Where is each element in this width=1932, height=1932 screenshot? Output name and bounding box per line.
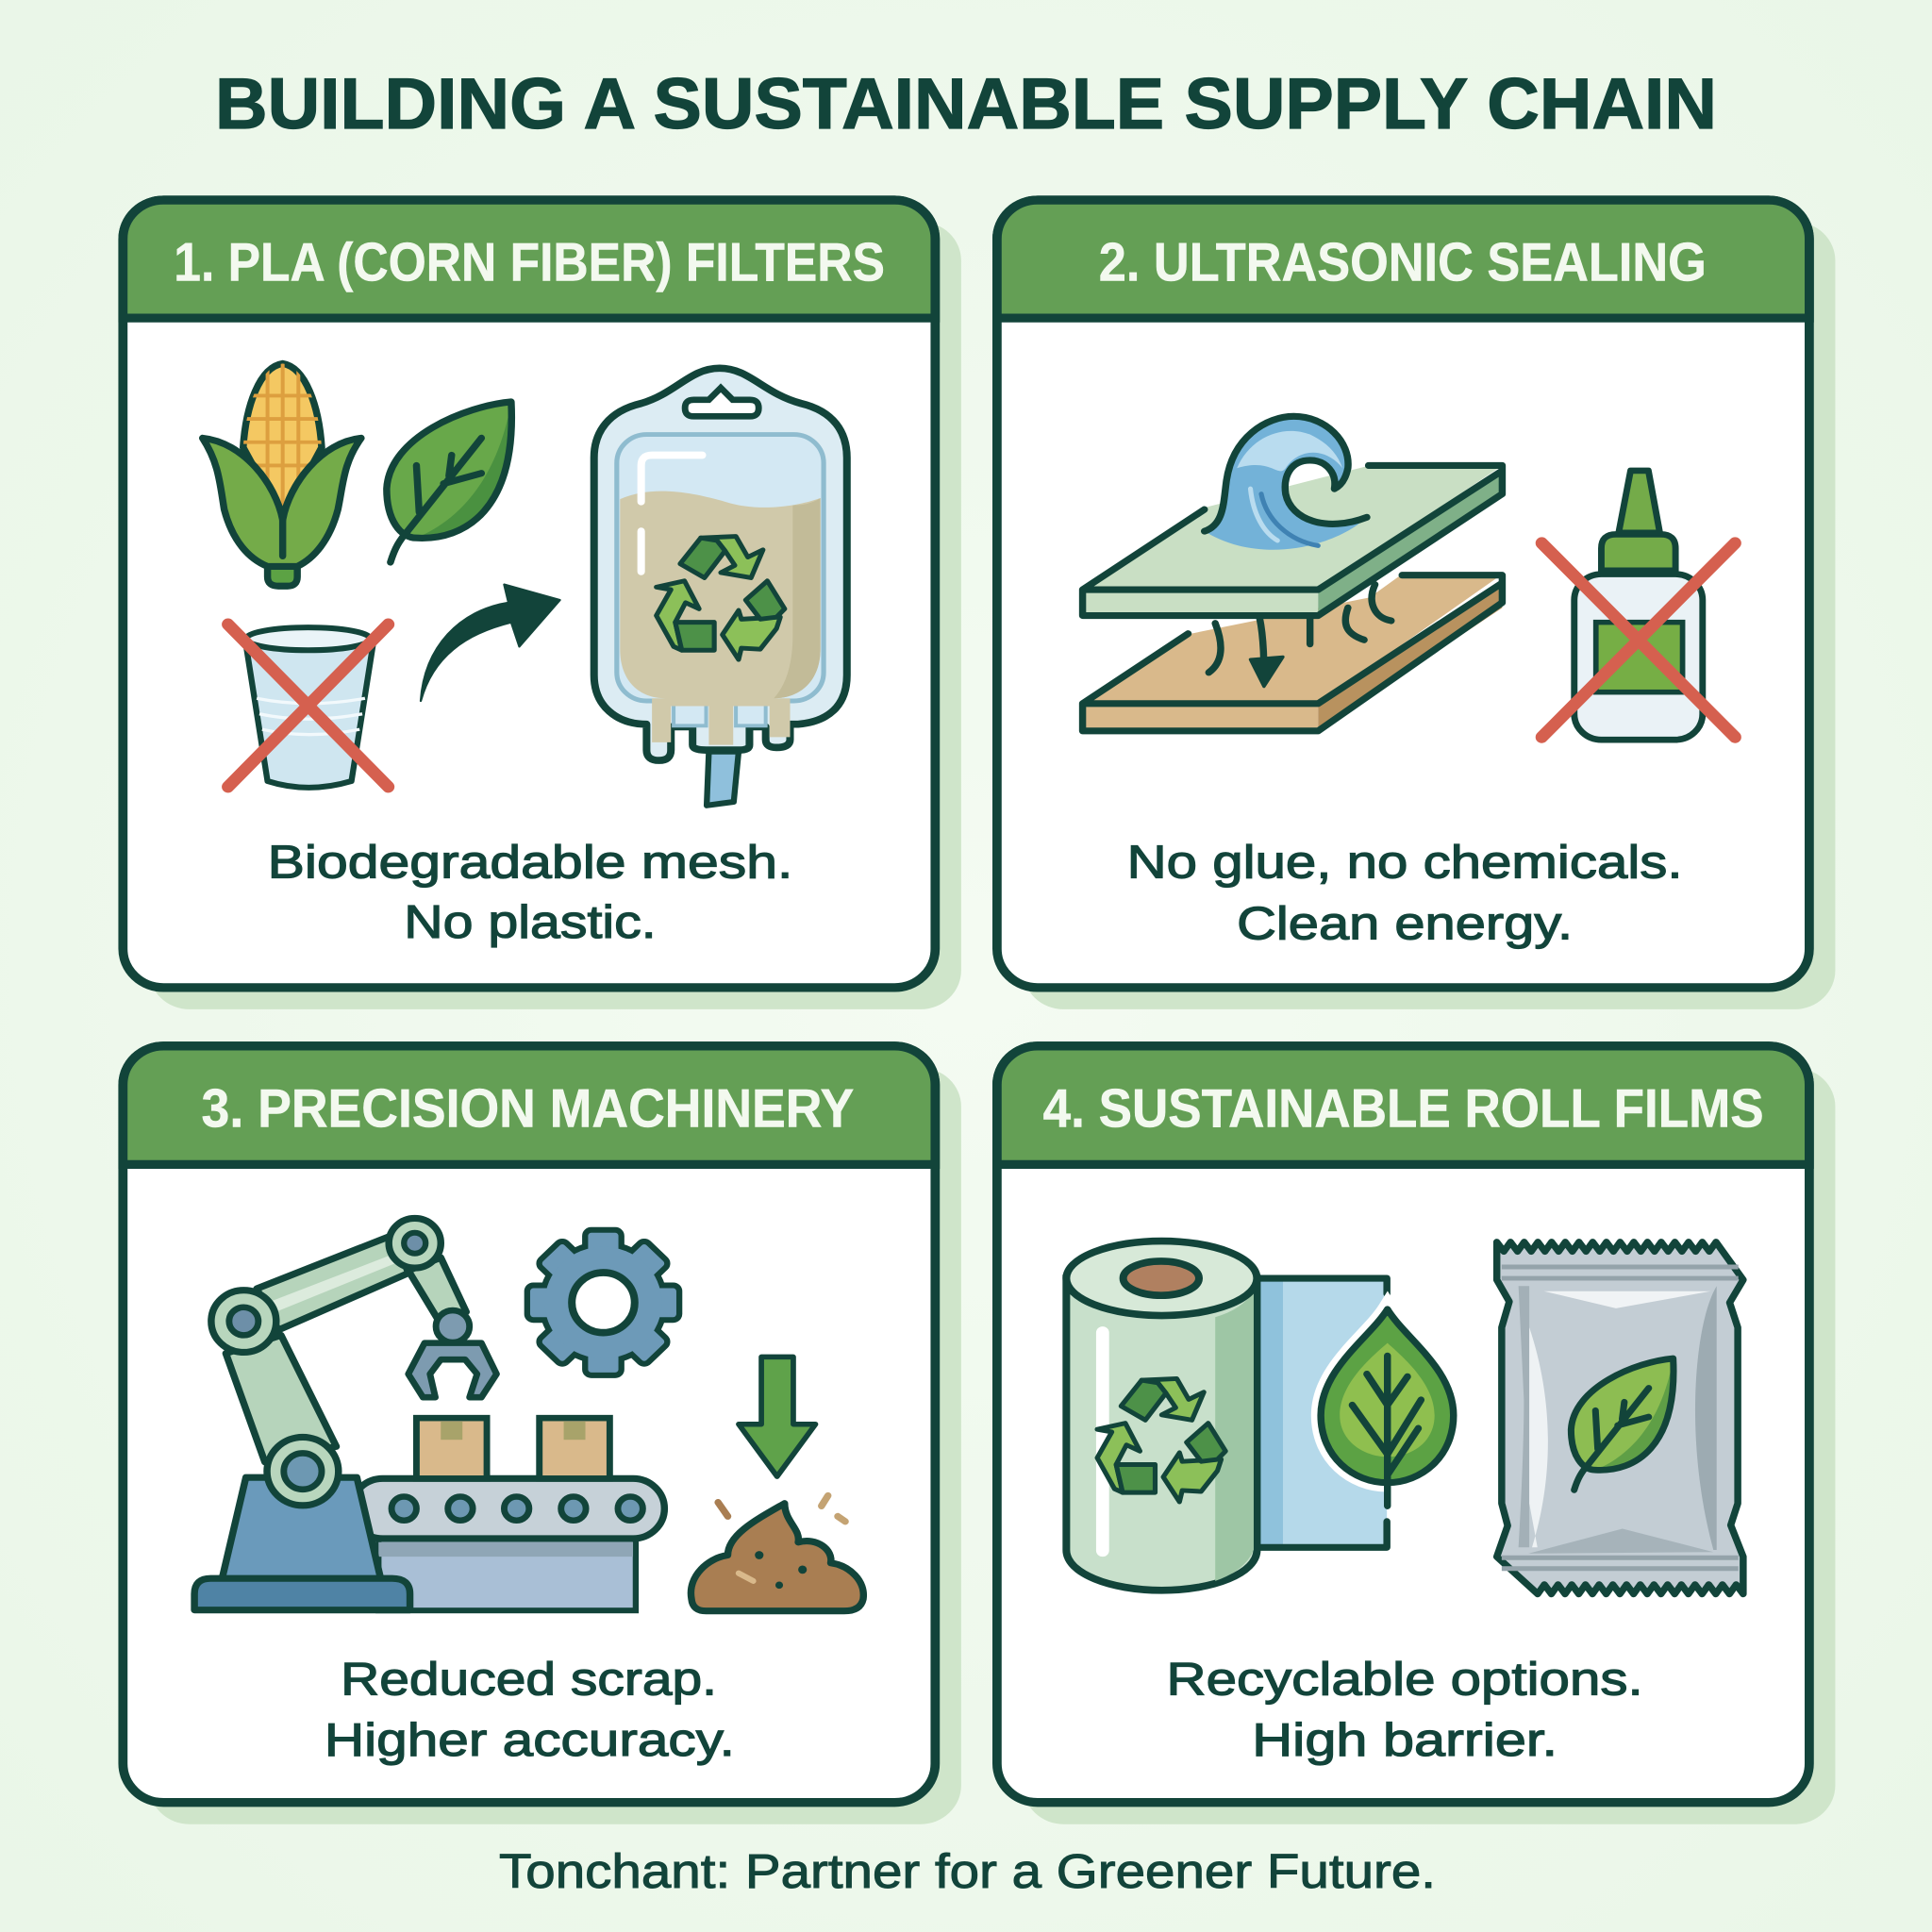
caption: No glue, no chemicals. xyxy=(1127,836,1683,888)
arrow xyxy=(421,585,560,701)
icon: film roll xyxy=(1066,1241,1257,1591)
icon: large leaf xyxy=(1321,1309,1454,1506)
icon: robot arm xyxy=(194,1218,496,1610)
icon: sealed pouch xyxy=(1497,1242,1743,1594)
caption line 2: Clean energy. xyxy=(1237,896,1573,949)
card frame xyxy=(997,200,1835,1009)
icon: bottom plate xyxy=(1083,575,1502,731)
caption line 2: No plastic. xyxy=(404,895,657,948)
icon: top plate xyxy=(1083,465,1502,616)
icon: conveyor belt xyxy=(352,1478,664,1610)
icon: recycling symbol on roll xyxy=(1097,1378,1225,1502)
title: BUILDING A SUSTAINABLE SUPPLY CHAIN xyxy=(215,64,1717,144)
caption: Biodegradable mesh. xyxy=(268,836,792,888)
card frame xyxy=(997,1046,1835,1824)
icon: filter bag xyxy=(594,368,847,806)
panel: ultrasonic sealing xyxy=(997,200,1835,1009)
icon: vibration lines and arrow xyxy=(1208,585,1391,687)
panel: PLA corn fiber filters xyxy=(123,200,961,1009)
icon: small leaf on pouch xyxy=(1571,1358,1674,1490)
icon: crossed plastic cup xyxy=(228,625,389,788)
caption line 2: Higher accuracy. xyxy=(325,1713,735,1766)
icon: gear xyxy=(530,1233,676,1373)
heading: 3. PRECISION MACHINERY xyxy=(202,1079,854,1139)
panel: precision machinery xyxy=(123,1046,961,1824)
icon: down arrow xyxy=(739,1357,815,1476)
panel: sustainable roll films xyxy=(997,1046,1835,1824)
icon: crossed glue bottle xyxy=(1541,471,1735,740)
icon: unrolled film xyxy=(1256,1278,1387,1547)
caption line 2: High barrier. xyxy=(1252,1713,1557,1766)
icon: sound wave xyxy=(1205,416,1367,550)
caption: Recyclable options. xyxy=(1167,1653,1643,1705)
icon: leaf xyxy=(387,402,511,562)
icon: compost pile xyxy=(691,1495,863,1611)
heading: 1. PLA (CORN FIBER) FILTERS xyxy=(174,233,885,292)
card frame xyxy=(123,1046,961,1824)
card frame xyxy=(123,200,961,1009)
icon: corn cob xyxy=(203,362,361,586)
heading: 2. ULTRASONIC SEALING xyxy=(1099,233,1707,292)
icon: cardboard boxes xyxy=(416,1418,609,1478)
caption: Reduced scrap. xyxy=(341,1653,717,1705)
footer tagline: Tonchant: Partner for a Greener Future. xyxy=(499,1844,1436,1898)
icon: recycling symbol xyxy=(657,537,785,659)
heading: 4. SUSTAINABLE ROLL FILMS xyxy=(1043,1079,1764,1139)
